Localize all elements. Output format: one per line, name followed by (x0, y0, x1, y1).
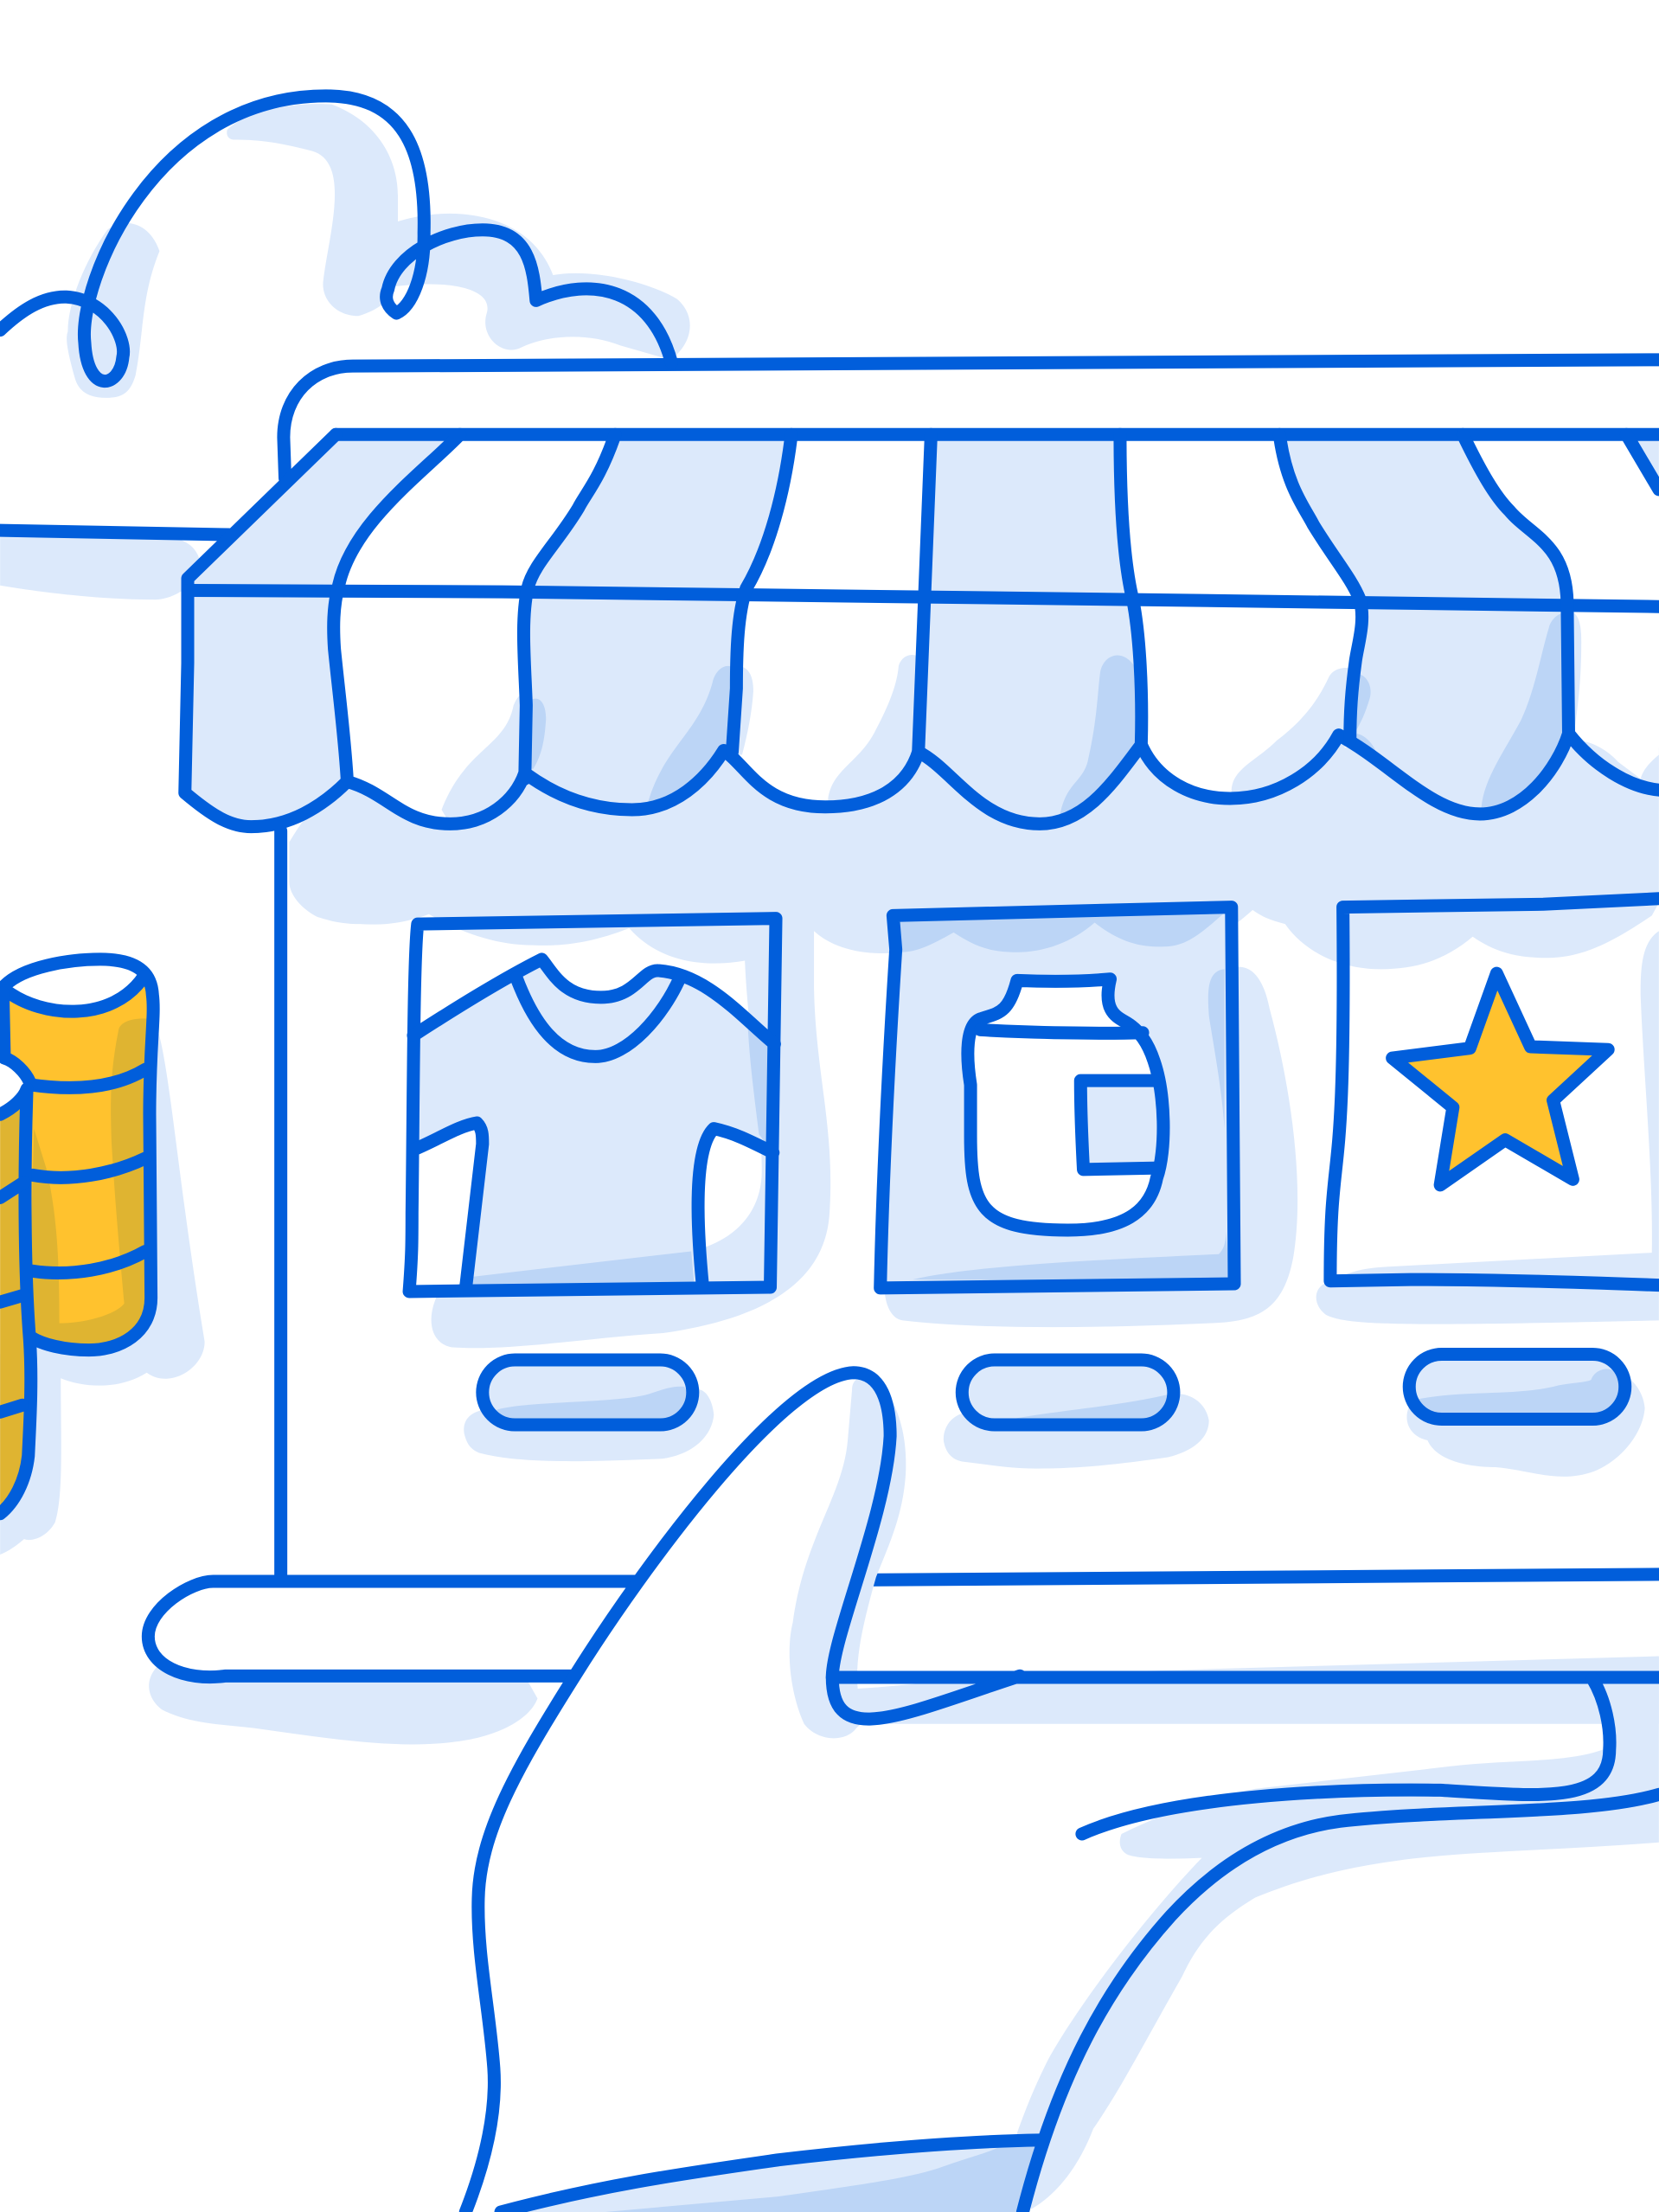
window: t-shirt (409, 919, 776, 1292)
counter (148, 1574, 1659, 1745)
pill button 1 (483, 1360, 693, 1425)
awning stripes (185, 434, 1659, 827)
awning outline (185, 434, 1659, 827)
pill button 2 (962, 1360, 1174, 1425)
window: bottle (881, 907, 1234, 1288)
pill button 3 (1409, 1355, 1625, 1420)
building roof outline (284, 360, 1659, 478)
squiggly cloud line (0, 96, 671, 381)
hand outlines (465, 1373, 1659, 2212)
storefront pillar (277, 831, 285, 1583)
window drop shadows (464, 931, 1659, 1477)
coin shadows (0, 1023, 205, 1555)
facade shadow band (289, 747, 1659, 1348)
hand shadows (790, 1377, 1659, 2209)
cloud shadows (0, 104, 690, 599)
sleeve cuff (501, 2140, 1040, 2212)
window: star (1330, 899, 1659, 1286)
hand (465, 1373, 1659, 2212)
coin stacks (0, 959, 153, 1514)
icon: star (1393, 973, 1608, 1185)
left ground line (0, 530, 228, 535)
